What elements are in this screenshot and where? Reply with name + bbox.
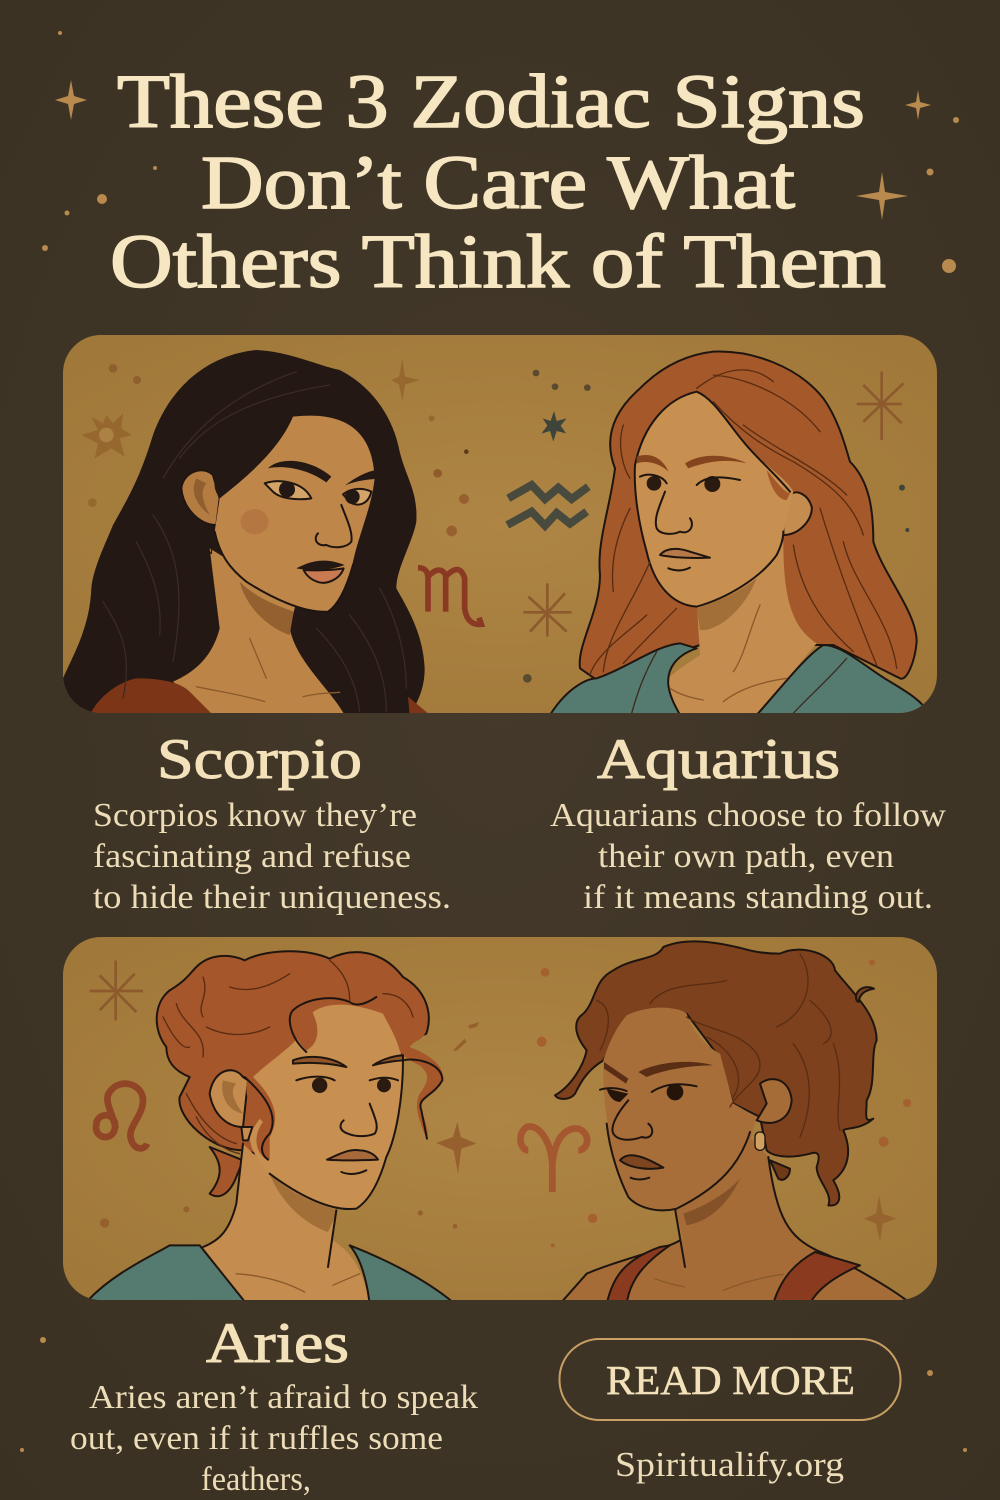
website credit: Spiritualify.org <box>615 1445 844 1484</box>
heading: Aquarius: Aquarius <box>597 728 840 791</box>
text block: Aquarius description <box>550 797 946 916</box>
portrait: Leo woman with zodiac symbol <box>88 951 480 1304</box>
text block: Aries description: out, even if it ruffles some <box>70 1420 443 1457</box>
icon: small dark star and dots <box>523 370 909 683</box>
title <box>110 60 886 304</box>
text block: Scorpio description: fascinating and refuse <box>93 838 411 875</box>
portrait: Aquarius woman with zodiac symbol <box>507 352 930 715</box>
icon: aquarius background stars <box>523 372 903 637</box>
icon: Aries symbol <box>520 1126 587 1192</box>
text block: Aquarius description: their own path, even <box>598 838 894 875</box>
text block: Scorpio description: Scorpios know they’re <box>93 797 417 834</box>
panel: Scorpio and Aquarius portraits <box>63 335 937 715</box>
portrait: Scorpio woman with zodiac symbol <box>63 350 481 715</box>
title: Don’t Care What <box>201 141 795 225</box>
icon: leo background stars <box>90 960 143 1020</box>
heading: Scorpio: Scorpio <box>157 728 362 791</box>
title: These 3 Zodiac Signs <box>117 60 865 144</box>
icon: Leo symbol <box>96 1084 147 1148</box>
text block: Aries description: feathers, <box>201 1461 311 1498</box>
text block: Aquarius description: if it means standing out. <box>583 879 933 916</box>
text block: Aries description <box>70 1379 478 1498</box>
text block: Aries description: Aries aren’t afraid to speak <box>89 1379 478 1416</box>
icon: scorpio background stars <box>81 358 469 536</box>
text block: Scorpio description: to hide their uniqueness. <box>93 879 451 916</box>
curls <box>246 1013 443 1160</box>
heading: Aries: Aries <box>206 1312 349 1375</box>
button: read more: READ MORE <box>606 1357 855 1403</box>
text block: Scorpio description <box>93 797 451 916</box>
text block: Aquarius description: Aquarians choose to follow <box>550 797 946 834</box>
icon: aries dots and star <box>537 959 911 1247</box>
title: Others Think of Them <box>110 220 886 304</box>
icon: Aquarius symbol <box>507 485 588 526</box>
icon: Scorpio symbol <box>418 568 481 624</box>
icon: leo dots and four-point star <box>100 1022 480 1229</box>
panel: Leo and Aries portraits <box>63 937 937 1304</box>
button: read more <box>560 1339 900 1420</box>
portrait: Aries woman with zodiac symbol <box>520 941 911 1304</box>
